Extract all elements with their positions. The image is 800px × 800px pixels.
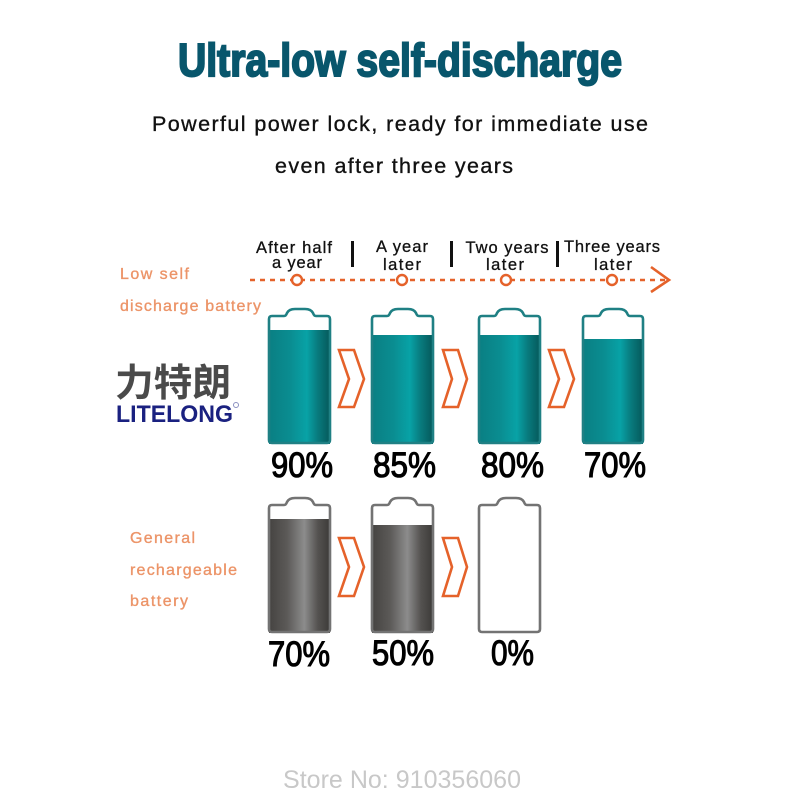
- logo: Litelong: 力特朗: [115, 363, 231, 405]
- battery 70%: [583, 309, 643, 444]
- timeline separators: [351, 241, 559, 267]
- subtitle: [152, 112, 648, 178]
- timeline labels: [256, 238, 660, 274]
- timeline labels: Two years: [466, 239, 548, 257]
- label: low self discharge battery: discharge battery: [120, 298, 261, 315]
- label: low self discharge battery: Low self: [120, 266, 190, 283]
- percentages: bottom row: 0%: [491, 634, 534, 673]
- timeline labels: later: [594, 256, 632, 274]
- logo: Litelong: [115, 363, 238, 428]
- percentages: bottom row: 50%: [372, 634, 434, 673]
- chevron: [339, 350, 364, 407]
- label: low self discharge battery: [120, 266, 261, 315]
- subtitle: even after three years: [275, 154, 513, 178]
- grey battery 70%: [269, 498, 330, 633]
- timeline labels: After half: [256, 239, 332, 257]
- subtitle: Powerful power lock, ready for immediate use: [152, 112, 648, 136]
- empty battery 0%: [479, 498, 540, 632]
- battery 80%: [479, 309, 540, 444]
- chevron: [443, 350, 467, 407]
- store number watermark: Store No: 910356060: [283, 766, 521, 794]
- percentages: top row: [271, 446, 646, 485]
- timeline labels: later: [383, 256, 422, 274]
- battery 85%: [372, 309, 433, 444]
- timeline labels: a year: [272, 254, 322, 272]
- timeline labels: A year: [376, 238, 428, 256]
- percentages: top row: 90%: [271, 446, 333, 485]
- percentages: bottom row: 70%: [268, 635, 330, 674]
- label: general rechargeable battery: battery: [130, 593, 188, 610]
- label: general rechargeable battery: General: [130, 530, 195, 547]
- grey battery 50%: [372, 498, 433, 633]
- timeline labels: Three years: [564, 238, 660, 256]
- chevron: [339, 538, 364, 596]
- logo: Litelong: LITELONG: [116, 401, 233, 428]
- label: general rechargeable battery: rechargeable: [130, 562, 237, 579]
- chevron: [549, 350, 574, 407]
- percentages: top row: 85%: [373, 446, 436, 485]
- percentages: top row: 70%: [584, 446, 646, 485]
- timeline labels: later: [486, 256, 524, 274]
- chevron: [443, 538, 467, 596]
- percentages: top row: 80%: [481, 446, 544, 485]
- timeline arrow: [250, 267, 669, 292]
- battery 90%: [269, 309, 330, 444]
- label: general rechargeable battery: [130, 530, 237, 610]
- title: Ultra-low self-discharge: [178, 34, 622, 86]
- percentages: bottom row: [268, 634, 534, 674]
